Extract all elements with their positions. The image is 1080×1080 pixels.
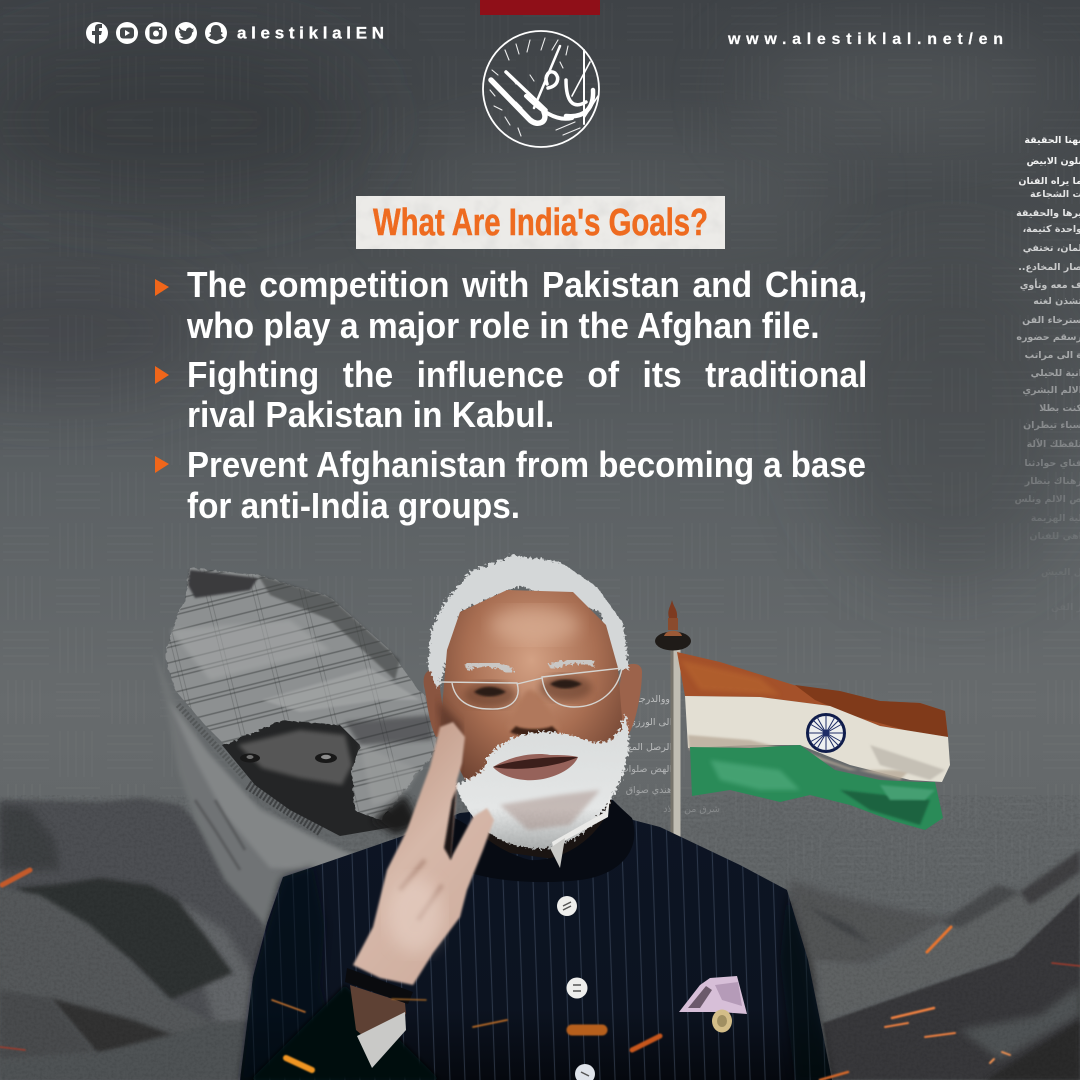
eyebrows <box>466 664 513 672</box>
icon: twitter <box>175 22 197 44</box>
icon: instagram <box>145 22 167 44</box>
faint calligraphy behind portrait <box>620 694 720 815</box>
hooded figure with turban <box>153 568 436 925</box>
buttons <box>557 896 595 1080</box>
pocket square <box>679 976 747 1032</box>
faint calligraphy behind portrait: شرق من ميلاد <box>663 804 720 815</box>
flagpole <box>655 600 691 841</box>
green band <box>690 745 943 830</box>
bullet text 2 <box>187 354 867 435</box>
logo: calligraphy roundel <box>483 31 599 147</box>
title text: What Are India's Goals? <box>373 202 708 244</box>
bullet text 3: for anti-India groups. <box>187 485 520 526</box>
right: far faint hills <box>790 880 960 1000</box>
eyes <box>464 682 516 708</box>
wrist <box>350 985 406 1040</box>
right: light slope <box>815 850 1080 1023</box>
dark wedge <box>50 998 187 1053</box>
icon: youtube <box>116 22 138 44</box>
decorative Arabic text column: ص الالم ونلس <box>1014 494 1080 505</box>
turban <box>165 568 436 820</box>
Ashoka chakra <box>808 714 844 752</box>
right: dark foreground <box>823 893 1080 1080</box>
hair <box>428 555 629 690</box>
collar <box>445 800 634 882</box>
light foreground hill <box>0 888 213 1062</box>
website url: www.alestiklal.net/en <box>727 31 1003 48</box>
handle text: alestiklalEN <box>237 24 384 42</box>
icon: snapchat <box>205 22 227 44</box>
neck <box>470 790 615 860</box>
icon: facebook <box>86 22 108 44</box>
shawl <box>153 650 372 925</box>
saffron band <box>677 652 948 737</box>
beard <box>455 714 629 849</box>
far left ridge <box>0 798 270 1080</box>
text: Fighting the influence of its traditional <box>187 354 867 395</box>
main portrait: man waving <box>240 555 832 1080</box>
ember sparks <box>0 870 1080 1080</box>
glasses <box>440 668 622 709</box>
mountains <box>0 795 1080 1080</box>
bullet markers <box>155 279 169 473</box>
bullet text 1 <box>186 264 867 346</box>
hand <box>345 722 494 1068</box>
mouth <box>493 754 578 780</box>
dark dome <box>15 878 233 1000</box>
faint calligraphy behind portrait: ووالدرجة <box>635 694 670 705</box>
text: rival Pakistan in Kabul. <box>187 394 554 435</box>
wristband <box>345 968 413 1004</box>
nose <box>507 690 560 735</box>
shirt cuff <box>357 1012 406 1068</box>
ears <box>424 670 446 737</box>
faint calligraphy behind portrait: هندي صواق <box>626 785 672 796</box>
face <box>440 590 623 810</box>
title badge <box>356 196 725 249</box>
text: who play a major role in the Afghan file. <box>187 305 820 346</box>
social media icons <box>86 22 227 44</box>
shirt collar <box>552 795 610 847</box>
Indian flag <box>677 652 950 830</box>
red top tab <box>480 0 600 15</box>
jacket <box>240 797 832 1080</box>
decorative Arabic text column <box>1014 135 1080 613</box>
faint calligraphy behind portrait: الى الورزي <box>628 717 672 728</box>
white band <box>685 696 950 782</box>
text: The competition with Pakistan and China, <box>187 264 867 305</box>
face <box>222 720 405 836</box>
bullet text 3: Prevent Afghanistan from becoming a base <box>187 444 866 485</box>
faint calligraphy behind portrait: الهض صلوات <box>620 764 672 775</box>
faint calligraphy behind portrait: الرصل المع <box>627 742 672 753</box>
